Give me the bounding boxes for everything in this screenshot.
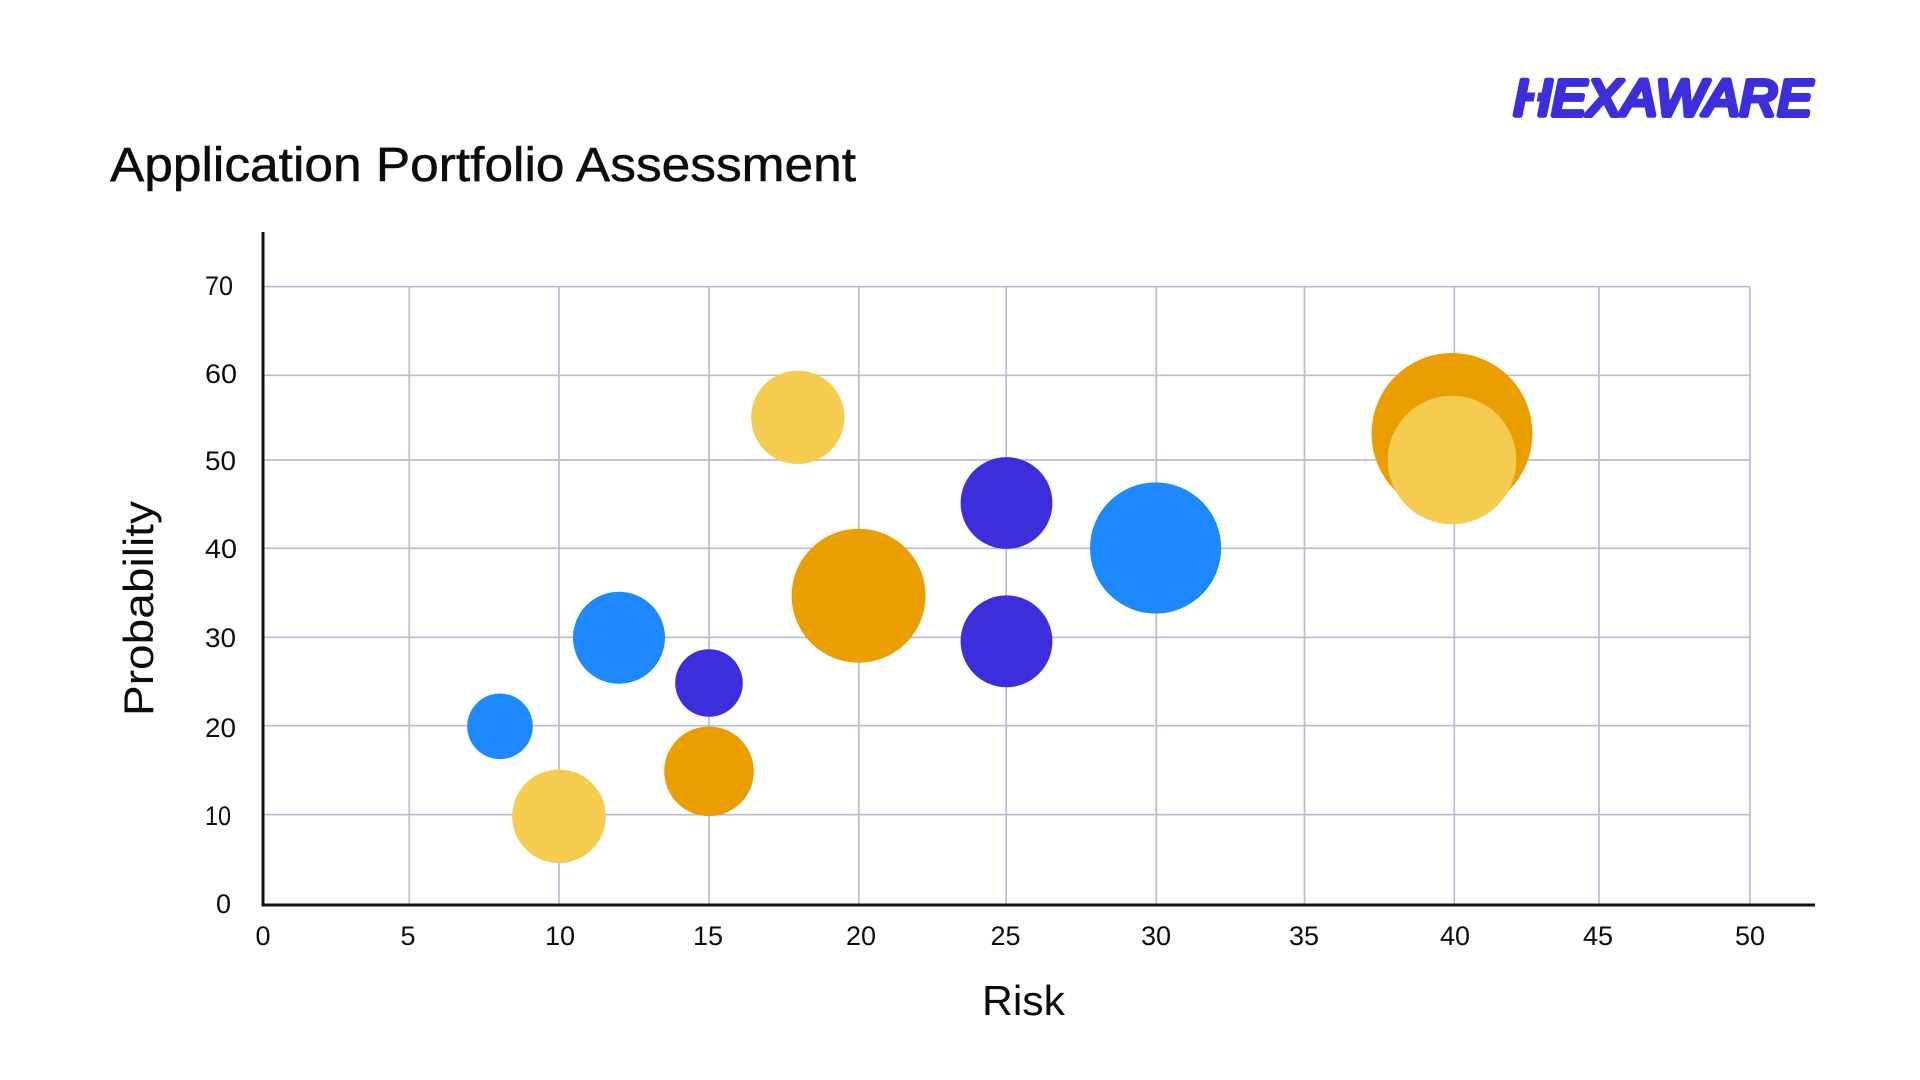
x-axis tick labels: 40 bbox=[1440, 921, 1470, 951]
y-axis tick labels: 40 bbox=[205, 534, 237, 564]
x-axis tick labels: 30 bbox=[1141, 921, 1171, 951]
bubble: orange 40,53 bbox=[1372, 353, 1532, 514]
logo: Hexaware: HEXAWARE bbox=[1514, 70, 1814, 126]
bubble: blue 8,20 bbox=[467, 694, 533, 759]
bubble: orange 20,35 bbox=[792, 529, 926, 663]
y-axis tick labels: 20 bbox=[205, 713, 236, 743]
bubble chart bbox=[115, 232, 1815, 1024]
y-axis tick labels: 70 bbox=[205, 271, 233, 301]
x-axis tick labels: 35 bbox=[1289, 921, 1319, 951]
y-axis tick labels: 30 bbox=[205, 623, 236, 653]
x-axis tick labels: 50 bbox=[1735, 921, 1765, 951]
bubble: indigo 15,25 bbox=[675, 649, 743, 717]
bubble: blue 30,40 bbox=[1090, 482, 1221, 614]
bubbles bbox=[467, 353, 1533, 863]
x-axis tick labels bbox=[255, 921, 1765, 951]
y-axis tick labels: 60 bbox=[205, 359, 237, 389]
y-axis tick labels bbox=[205, 271, 237, 919]
grid lines bbox=[263, 287, 1750, 904]
x-axis tick labels: 20 bbox=[846, 921, 876, 951]
y-axis title: Probability bbox=[115, 501, 162, 716]
title: Application Portfolio Assessment bbox=[110, 139, 856, 192]
x-axis tick labels: 10 bbox=[545, 921, 575, 951]
y-axis tick labels: 0 bbox=[216, 889, 231, 919]
bubble: yellow 18,55 bbox=[751, 371, 844, 464]
bubble: yellow 40,50 bbox=[1388, 396, 1516, 524]
axes bbox=[263, 232, 1815, 905]
x-axis tick labels: 15 bbox=[693, 921, 723, 951]
x-axis tick labels: 25 bbox=[990, 921, 1021, 951]
x-axis tick labels: 0 bbox=[255, 921, 271, 951]
x-axis title: Risk bbox=[982, 977, 1066, 1024]
bubble: blue 12,30 bbox=[573, 592, 665, 684]
bubble: orange 15,15 bbox=[664, 726, 754, 816]
y-axis tick labels: 50 bbox=[205, 446, 236, 476]
x-axis tick labels: 45 bbox=[1583, 921, 1613, 951]
x-axis tick labels: 5 bbox=[400, 921, 416, 951]
y-axis tick labels: 10 bbox=[205, 801, 231, 831]
bubble: indigo 25,30 bbox=[961, 595, 1052, 687]
bubble: yellow 10,10 bbox=[512, 770, 606, 863]
bubble: indigo 25,45 bbox=[961, 457, 1052, 549]
